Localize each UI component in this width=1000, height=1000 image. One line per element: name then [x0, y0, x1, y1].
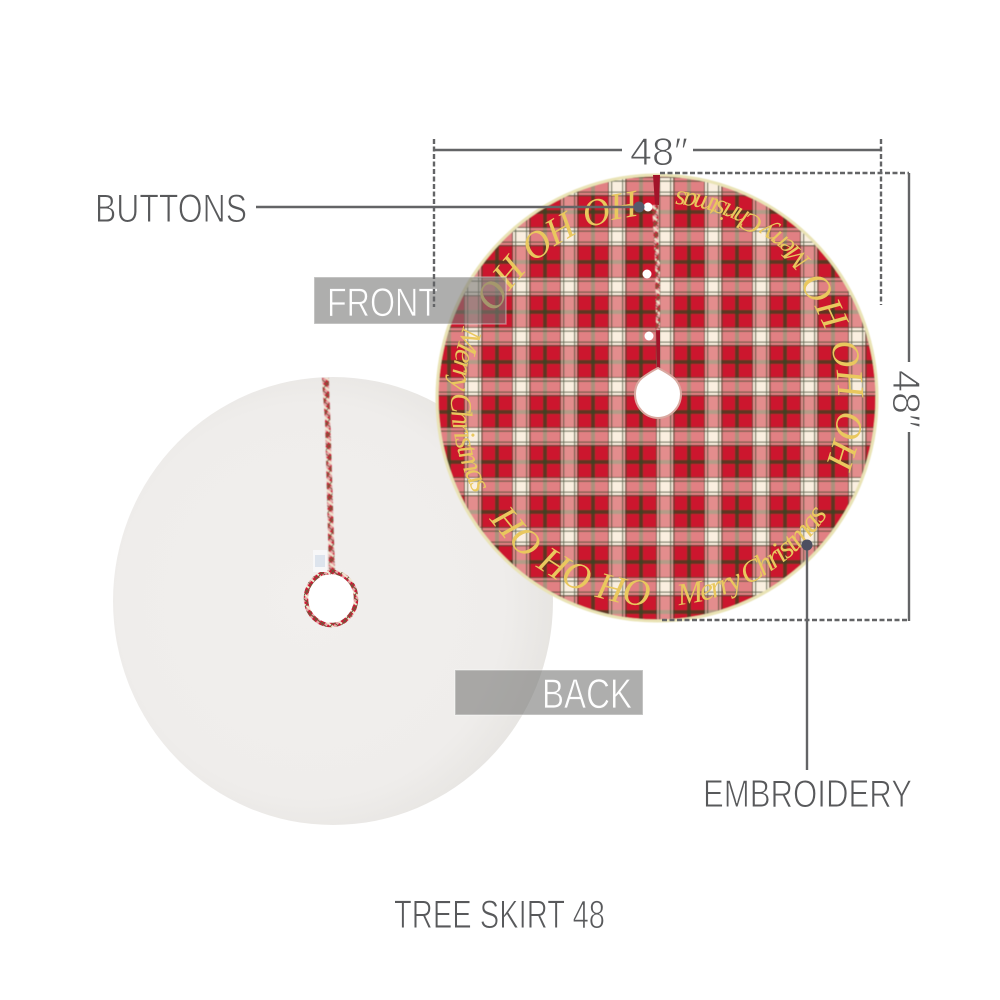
dimension: height 48 inches: 48″: [884, 370, 927, 428]
dimension: width 48 inches: [434, 131, 881, 307]
panel: front of tree skirt: [435, 173, 879, 623]
gold embroidery around the border: HO HO HO: [804, 276, 864, 473]
gold embroidery around the border: Merry Christmas: [445, 326, 486, 492]
gold embroidery around the border: Merry Christmas: [675, 191, 812, 270]
callout: buttons: [95, 187, 644, 231]
label: BACK: BACK: [542, 670, 632, 717]
label: BACK: [455, 670, 643, 717]
back plaid slit binding: [322, 378, 335, 572]
label: FRONT: [314, 277, 506, 325]
gold embroidery around the border: HO HO HO: [480, 190, 636, 308]
front buttons: [642, 202, 654, 340]
gold embroidery around the border: [445, 190, 864, 606]
dimension: height 48 inches: [660, 173, 927, 621]
back fabric care tag: [313, 550, 327, 572]
back cream fabric circle: [113, 377, 553, 825]
front plaid fabric circle with cream trim: [437, 175, 877, 621]
back plaid center ring: [306, 572, 356, 625]
gold embroidery around the border: HO HO HO: [488, 506, 650, 606]
dimension: width 48 inches: 48″: [630, 131, 688, 174]
callout: embroidery: EMBROIDERY: [703, 773, 912, 816]
callout: embroidery: [703, 540, 912, 816]
front slit seam: [653, 175, 660, 370]
callout: buttons: BUTTONS: [95, 187, 247, 231]
front seam plaid binding: [652, 205, 660, 330]
title: product name: TREE SKIRT 48: [394, 893, 605, 937]
panel: back of tree skirt: [113, 377, 553, 825]
gold embroidery around the border: Merry Christmas: [678, 506, 826, 606]
label: FRONT: FRONT: [327, 281, 438, 325]
front center hole: [635, 368, 681, 418]
